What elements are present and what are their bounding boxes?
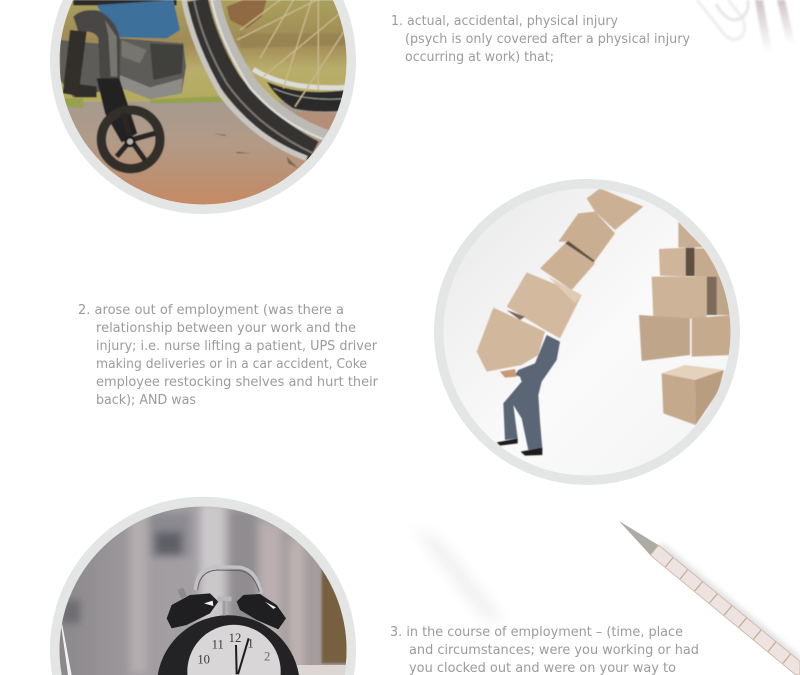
text block: item 2: back); AND was	[96, 393, 196, 408]
text block: item 2: injury; i.e. nurse lifting a patient, UPS driver	[96, 339, 378, 354]
text block: item 3: 3. in the course of employment – (time, place	[390, 625, 683, 640]
text block: item 2	[78, 303, 379, 408]
jeans	[97, 0, 180, 38]
soft fold shadow	[413, 527, 505, 622]
text block: item 3	[390, 625, 699, 675]
caster wheel	[101, 110, 160, 169]
text block: item 2: employee restocking shelves and hurt their	[96, 375, 379, 390]
rear wheel	[237, 0, 347, 112]
photo background: grass and pavement	[50, 0, 350, 208]
background boxes	[639, 222, 732, 425]
text block: item 3: and circumstances; were you working or had	[409, 643, 699, 658]
clock numerals and hands: 1	[247, 636, 254, 650]
shoe	[60, 38, 186, 99]
text block: item 1	[391, 14, 690, 65]
text block: item 2: making deliveries or in a car accident, Coke	[96, 357, 367, 372]
clock numerals and hands: 11	[212, 638, 224, 652]
photo circle: wheelchair	[50, 0, 356, 214]
paper clips decoration	[697, 0, 795, 52]
clock body	[158, 567, 299, 675]
text block: item 1: occurring at work) that;	[405, 50, 554, 65]
clock numerals and hands: 10	[197, 652, 210, 666]
text block: item 2: 2. arose out of employment (was there a	[78, 303, 344, 318]
text block: item 1: (psych is only covered after a physical injury	[405, 32, 690, 47]
clock numerals and hands: 2	[264, 650, 270, 664]
man in a grey suit	[497, 335, 560, 456]
text block: item 1: 1. actual, accidental, physical injury	[391, 14, 618, 29]
black seat edge	[73, 0, 177, 5]
clock numerals and hands	[197, 631, 270, 674]
stack of boxes on the man's back	[477, 188, 643, 372]
text block: item 2: relationship between your work and the	[96, 321, 356, 336]
blurred window background	[60, 503, 303, 673]
clock numerals and hands: 12	[229, 631, 241, 645]
photo circle: alarm clock	[50, 497, 356, 675]
main wheel rim and tyre	[184, 0, 327, 158]
photo circle: man carrying boxes	[434, 179, 740, 485]
wheelchair frame	[63, 10, 137, 143]
pencil	[619, 521, 800, 675]
